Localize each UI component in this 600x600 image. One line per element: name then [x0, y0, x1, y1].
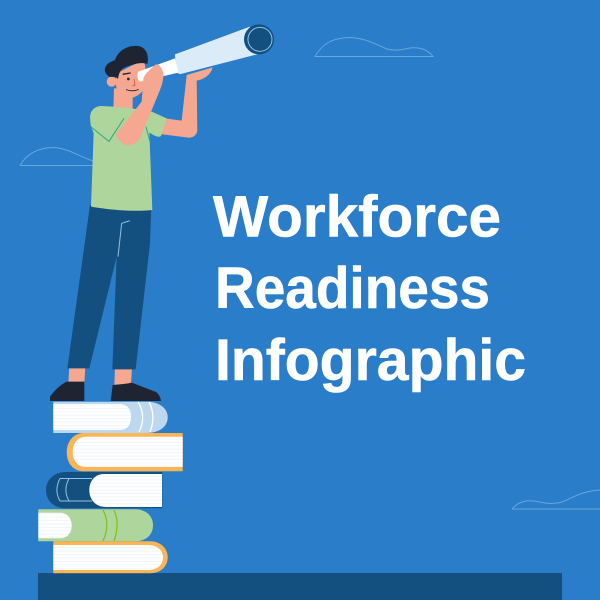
floor	[38, 573, 562, 600]
book stack	[38, 402, 183, 573]
trousers	[67, 205, 151, 369]
cloud: right	[512, 490, 600, 509]
book 3: navy	[46, 472, 162, 508]
telescope large tube	[175, 24, 274, 74]
title: Workforce	[213, 184, 501, 250]
shirt	[90, 106, 167, 211]
shoes	[50, 382, 161, 401]
cloud: top	[315, 38, 433, 56]
back arm	[160, 67, 213, 138]
face details	[123, 73, 139, 91]
hair	[105, 46, 148, 79]
title: Infographic	[215, 328, 526, 393]
person: upper body and telescope	[90, 24, 274, 211]
front arm	[116, 64, 163, 145]
book 5: orange	[53, 541, 168, 573]
book 2: orange	[67, 433, 183, 471]
ankles	[68, 367, 132, 385]
book 4: green	[38, 509, 153, 541]
book 1: light blue	[53, 402, 168, 433]
face	[116, 60, 146, 99]
ear	[107, 77, 117, 87]
title: Readiness	[215, 256, 490, 321]
cloud: left	[20, 148, 93, 166]
trouser crease	[118, 221, 130, 257]
neck	[113, 88, 133, 110]
title	[213, 184, 526, 393]
telescope eyepiece	[137, 58, 178, 82]
person: legs	[50, 205, 161, 401]
shirt seams	[91, 118, 150, 142]
